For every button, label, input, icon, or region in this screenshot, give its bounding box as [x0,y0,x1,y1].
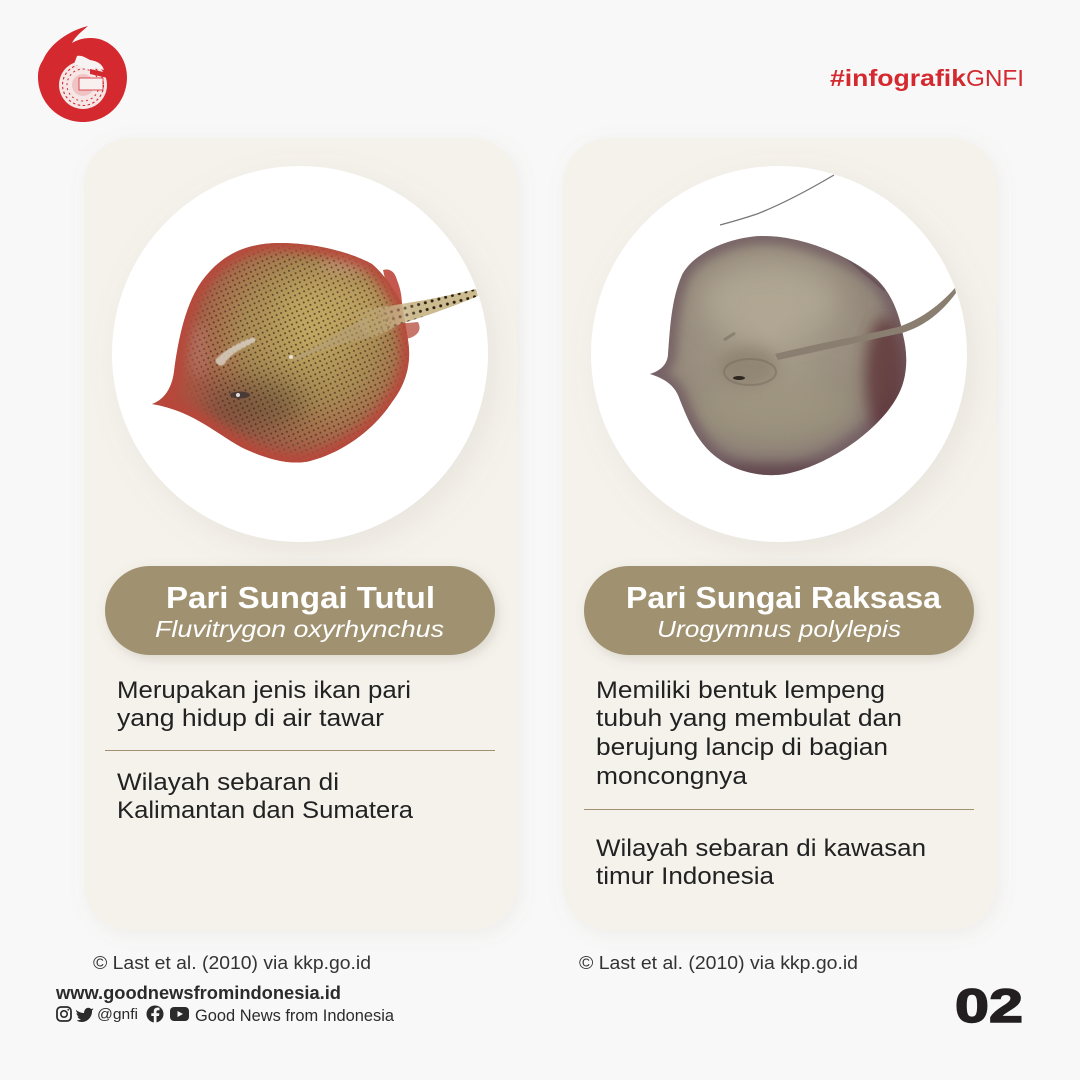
photo credit right: © Last et al. (2010) via kkp.go.id [579,953,858,973]
name pill: Pari Sungai Tutul: Fluvitrygon oxyrhynchus [155,616,445,642]
hashtag [830,65,1024,91]
description: distribution [596,835,926,890]
description: body shape: berujung lancip di bagian [596,734,888,761]
panel: Pari Sungai Raksasa [563,138,996,930]
photo credit left: © Last et al. (2010) via kkp.go.id [93,953,371,973]
social links [57,1006,395,1025]
website url: www.goodnewsfromindonesia.id [55,983,341,1003]
icon: twitter [76,1008,94,1022]
icon: instagram [57,1007,71,1021]
description: body shape [596,677,902,790]
description: distribution: Wilayah sebaran di kawasan [596,835,926,862]
name pill: Pari Sungai Tutul: Pari Sungai Tutul [166,580,435,615]
channel name: Good News from Indonesia [195,1006,395,1025]
stingray tail: Pari Sungai Raksasa [775,288,956,360]
name pill: Pari Sungai Raksasa: Pari Sungai Raksasa [626,580,942,615]
description: distribution: timur Indonesia [596,863,775,890]
hashtag: GNFI [966,65,1024,91]
name pill: Pari Sungai Raksasa [584,566,974,655]
description: habitat: yang hidup di air tawar [117,705,384,732]
handle: @gnfi [97,1006,138,1023]
description: body shape: Memiliki bentuk lempeng [596,677,885,704]
description: distribution [117,769,414,824]
description: habitat [117,677,411,732]
description: body shape: moncongnya [596,763,748,790]
name pill: Pari Sungai Raksasa: Urogymnus polylepis [657,616,902,642]
hashtag: #infografik [830,65,966,91]
panel: Pari Sungai Tutul [84,138,517,930]
description: distribution: Wilayah sebaran di [117,769,339,796]
icon: youtube [170,1007,189,1021]
page number: 02 [955,979,1023,1032]
description: body shape: tubuh yang membulat dan [596,705,902,732]
logo: GNFI red six with garuda [38,26,127,122]
icon: facebook [146,1006,164,1023]
photo circle: Pari Sungai Raksasa [591,166,967,542]
description: distribution: Kalimantan dan Sumatera [117,797,414,824]
photo circle: Pari Sungai Tutul [112,166,488,542]
stingray tail: Pari Sungai Tutul [292,289,478,361]
description: habitat: Merupakan jenis ikan pari [117,677,411,704]
name pill: Pari Sungai Tutul [105,566,495,655]
